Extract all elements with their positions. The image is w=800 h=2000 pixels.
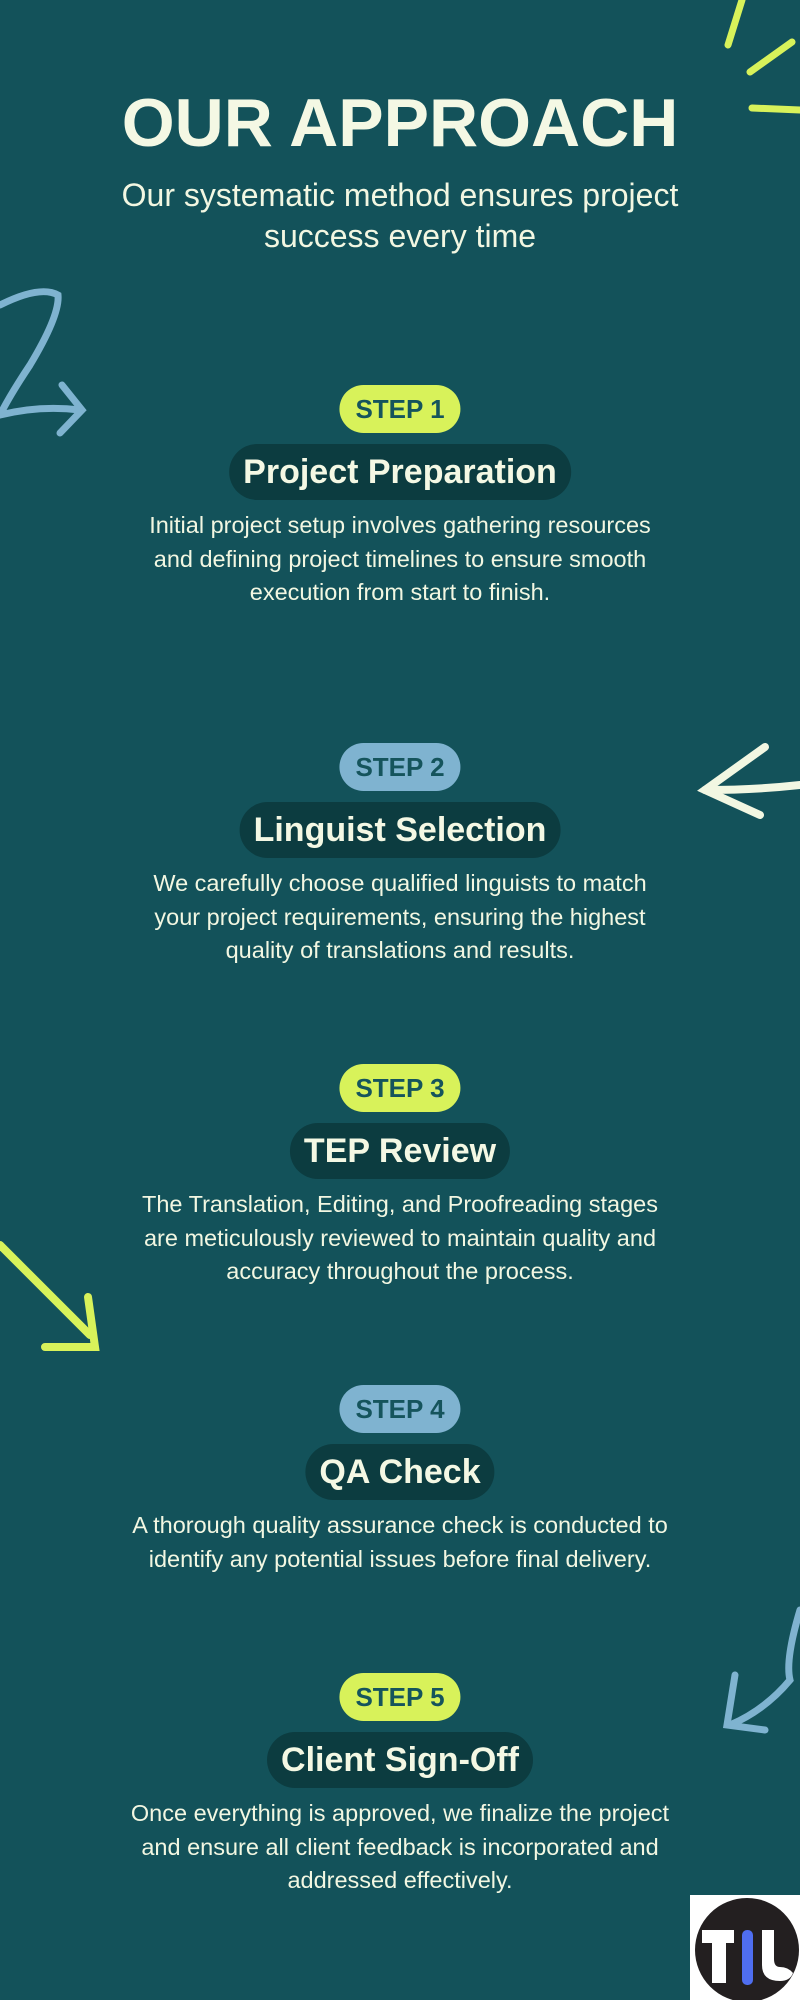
step 1 label: STEP 1 [355,394,445,424]
step 2 title: Linguist Selection [254,811,546,849]
arrow: lime left [0,1241,100,1351]
step 2 text: quality of translations and results. [226,937,574,963]
step 4 title [305,1444,495,1500]
step 4 label [339,1385,461,1433]
step 4 label: STEP 4 [355,1394,445,1424]
logo [690,1895,800,2000]
step 5 title: Client Sign-Off [281,1741,519,1779]
subtitle [122,177,678,254]
step 3 text: are meticulously reviewed to maintain quality and [144,1224,656,1250]
step 1 title [229,444,571,500]
step 2 text: your project requirements, ensuring the highest [154,904,646,930]
step 3 label: STEP 3 [355,1073,445,1103]
step 1 label [339,385,461,433]
step 1 text [149,512,651,605]
subtitle: Our systematic method ensures project [122,177,678,213]
step 5 [131,1673,669,1893]
arrow: blue right bottom [723,1606,800,1734]
step 2 [153,743,647,963]
step 5 label [339,1673,461,1721]
step 1 text: and defining project timelines to ensure smooth [154,546,646,572]
step 4 [132,1385,668,1572]
step 3 label [339,1064,461,1112]
step 3 text: accuracy throughout the process. [226,1258,574,1284]
step 4 text [132,1512,668,1572]
step 3 title: TEP Review [304,1132,496,1170]
step 2 label [339,743,461,791]
step 3 [142,1064,658,1284]
step 3 text [142,1191,658,1284]
title: OUR APPROACH [122,85,678,161]
arrow: blue left top [0,288,87,436]
step 2 text [153,870,647,963]
step 5 text [131,1800,669,1893]
step 4 text: A thorough quality assurance check is conducted to [132,1512,668,1538]
subtitle: success every time [264,218,536,254]
step 1 text: execution from start to finish. [250,579,550,605]
step 5 text: and ensure all client feedback is incorporated and [141,1834,659,1860]
step 5 text: Once everything is approved, we finalize the project [131,1800,669,1826]
step 2 label: STEP 2 [355,752,445,782]
step 3 title [290,1123,510,1179]
step 5 title [267,1732,533,1788]
step 4 text: identify any potential issues before final delivery. [149,1546,651,1572]
step 4 title: QA Check [319,1453,481,1491]
step 1 title: Project Preparation [243,453,557,491]
step 5 text: addressed effectively. [287,1867,513,1893]
step 3 text: The Translation, Editing, and Proofreading stages [142,1191,658,1217]
step 2 text: We carefully choose qualified linguists to match [153,870,647,896]
step 5 label: STEP 5 [355,1682,445,1712]
arrow: white right [697,743,800,819]
step 1 [149,385,651,605]
step 2 title [240,802,560,858]
step 1 text: Initial project setup involves gathering resources [149,512,651,538]
decoration: lime strokes top right [724,0,800,114]
